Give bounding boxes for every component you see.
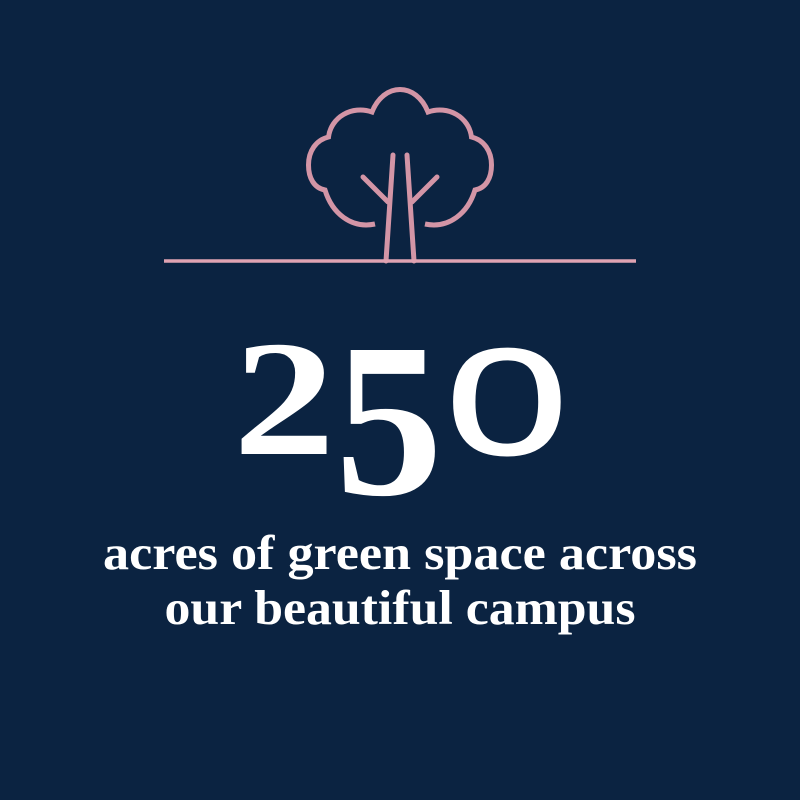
digit 2: 2 bbox=[233, 308, 335, 490]
tree branches bbox=[363, 177, 437, 202]
digit 5: 5 bbox=[335, 299, 443, 542]
icon: tree on ground line bbox=[164, 90, 636, 261]
tree crown outline bbox=[308, 90, 492, 225]
ground line bbox=[164, 259, 636, 263]
digit 0: 0 bbox=[446, 318, 568, 486]
tree trunk bbox=[386, 155, 414, 261]
caption line 1: acres of green space across bbox=[103, 525, 697, 580]
big number 250 bbox=[233, 299, 568, 542]
caption text bbox=[103, 525, 697, 635]
caption line 2: our beautiful campus bbox=[164, 580, 636, 635]
